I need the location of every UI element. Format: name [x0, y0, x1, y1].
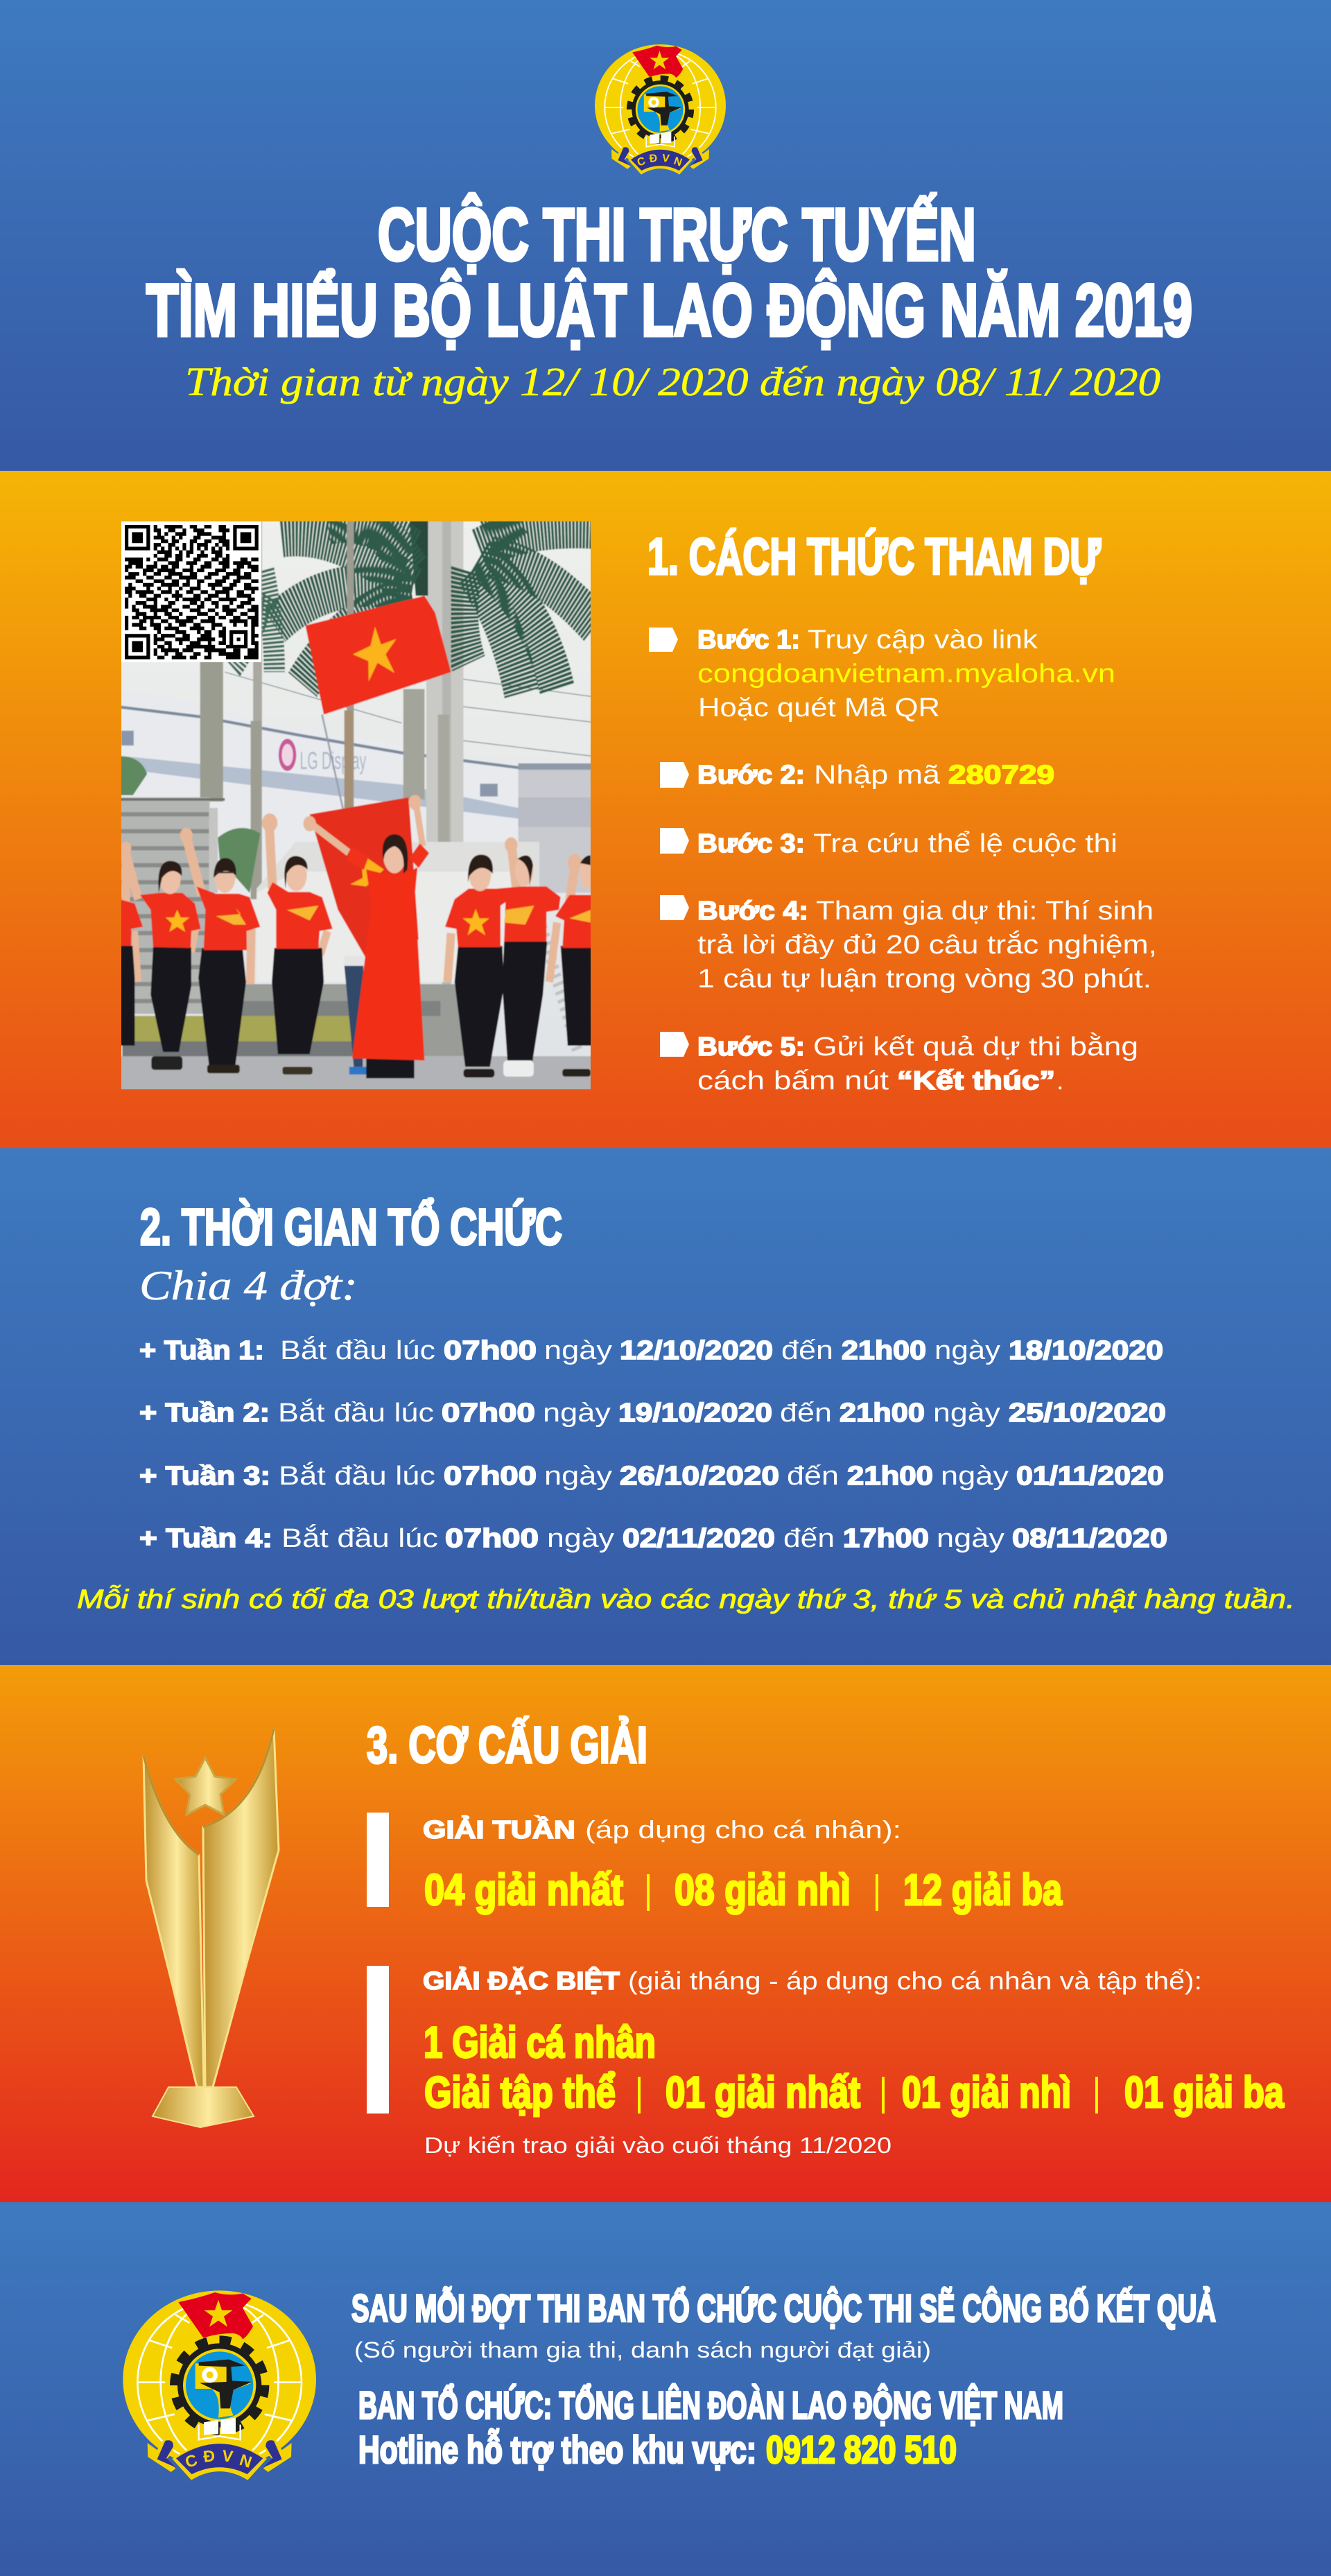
step 4: trả lời đầy đủ 20 câu trắc nghiệm,: [697, 930, 1157, 960]
week 3: ngày: [544, 1462, 612, 1491]
step 4: Tham gia dự thi: Thí sinh: [816, 897, 1154, 926]
weekly prize block: (áp dụng cho cá nhân):: [585, 1815, 901, 1844]
week 2: Bắt đầu lúc: [278, 1398, 434, 1428]
week 1: [139, 1335, 1163, 1365]
week 4: ngày: [937, 1524, 1004, 1553]
step 2: 280729: [948, 761, 1054, 790]
icon: union logo bottom: N: [237, 2450, 254, 2471]
week 1: đến: [781, 1336, 833, 1365]
week 2: [139, 1398, 1166, 1428]
week 4: 08/11/2020: [1012, 1524, 1167, 1553]
step 2: [660, 761, 1054, 790]
heading: section 2: 2. THỜI GIAN TỔ CHỨC: [140, 1198, 562, 1256]
weekly prize block: GIẢI TUẦN: [423, 1815, 575, 1844]
hotline: 0912 820 510: [766, 2428, 957, 2471]
step 3: [660, 828, 1117, 858]
step 5: Gửi kết quả dự thi bằng: [813, 1032, 1138, 1062]
footer note: (Số người tham gia thi, danh sách người đạt giải): [354, 2337, 931, 2362]
sign: LG Display: LG Display: [299, 746, 367, 774]
icon: union logo top: N: [672, 155, 684, 169]
person 7: [549, 856, 600, 1077]
week 1: ngày: [544, 1336, 612, 1365]
step 1: congdoanvietnam.myaloha.vn: [697, 659, 1115, 689]
icon: union logo bottom: Đ: [202, 2446, 216, 2466]
person 6: [503, 854, 582, 1077]
shed: [112, 797, 225, 1014]
step 5: cách bấm nút: [697, 1066, 889, 1096]
icon: gold trophy: [143, 1729, 279, 2127]
week 2: + Tuần 2:: [139, 1399, 270, 1428]
step 5: .: [1056, 1066, 1064, 1096]
panel: header: [0, 0, 1331, 471]
week 3: ngày: [941, 1462, 1009, 1491]
hotline: Hotline hỗ trợ theo khu vực:: [358, 2428, 756, 2471]
week 1: ngày: [934, 1336, 1000, 1365]
week 4: 02/11/2020: [623, 1524, 775, 1553]
week 3: 01/11/2020: [1016, 1462, 1164, 1491]
special prize block: 1 Giải cá nhân: [424, 2019, 656, 2067]
icon: union logo bottom: C: [183, 2450, 200, 2471]
step 4: 1 câu tự luận trong vòng 30 phút.: [697, 965, 1151, 994]
weekly prize block: 04 giải nhất: [424, 1866, 623, 1914]
week 1: 21h00: [842, 1336, 926, 1365]
special prize block: GIẢI ĐẶC BIỆT: [423, 1966, 620, 1995]
week 4: [139, 1523, 1167, 1553]
week 4: đến: [783, 1524, 835, 1553]
special prize block: 01 giải nhì: [902, 2068, 1071, 2117]
week 3: Bắt đầu lúc: [279, 1461, 435, 1491]
week 4: Bắt đầu lúc: [281, 1523, 438, 1553]
special prize block: (giải tháng - áp dụng cho cá nhân và tập thể):: [628, 1966, 1202, 1995]
panel: prizes: [0, 1665, 1331, 2202]
week 2: ngày: [933, 1399, 1000, 1428]
QR code: [121, 521, 261, 662]
heading: section 1: 1. CÁCH THỨC THAM DỰ: [647, 528, 1101, 585]
week 4: 07h00: [445, 1524, 539, 1553]
special prize block: Giải tập thể: [424, 2068, 616, 2117]
hand-held flag: [310, 797, 419, 958]
step 5: Bước 5:: [697, 1032, 805, 1062]
step 4: [660, 895, 1157, 994]
icon: union logo top: C: [636, 155, 647, 169]
weekly prize block: 12 giải ba: [903, 1866, 1063, 1914]
step 1: [649, 625, 1115, 723]
week 1: 07h00: [444, 1336, 537, 1365]
week 1: 12/10/2020: [620, 1336, 773, 1365]
person 1: [121, 842, 201, 1070]
woman in red ao dai: [304, 795, 424, 1078]
week 2: 07h00: [442, 1399, 535, 1428]
heading: section 3: 3. CƠ CẤU GIẢI: [367, 1716, 647, 1774]
person 2: [180, 828, 260, 1073]
icon: union logo bottom: [123, 2290, 316, 2480]
special prize block: [367, 1966, 1285, 2117]
step 1: Hoặc quét Mã QR: [698, 693, 940, 723]
week 3: + Tuần 3:: [139, 1462, 270, 1491]
step 2: Nhập mã: [814, 761, 941, 790]
week 3: 26/10/2020: [620, 1462, 779, 1491]
person 5: [445, 837, 522, 1078]
step 5: “Kết thúc”: [897, 1066, 1055, 1096]
sign: LG Display: [279, 738, 367, 774]
note: attempts per week: Mỗi thí sinh có tối đa 03 lượt thi/tuần vào các ngày thứ 3, thứ 5 và chủ nhật hàng tuần.: [77, 1584, 1295, 1614]
title line 1: CUỘC THI TRỰC TUYẾN: [378, 193, 976, 276]
flag on pole: [306, 596, 451, 715]
note: award date: Dự kiến trao giải vào cuối tháng 11/2020: [424, 2133, 891, 2158]
week 3: 21h00: [847, 1462, 933, 1491]
panel: schedule: [0, 1148, 1331, 1665]
week 3: đến: [787, 1462, 839, 1491]
step 3: Tra cứu thể lệ cuộc thi: [813, 829, 1117, 858]
special prize block: 01 giải ba: [1124, 2068, 1285, 2117]
week 1: + Tuần 1:: [139, 1336, 264, 1365]
week 1: Bắt đầu lúc: [280, 1335, 435, 1365]
icon: union logo top: Đ: [649, 153, 658, 165]
week 4: ngày: [547, 1524, 614, 1553]
week 4: + Tuần 4:: [139, 1524, 272, 1553]
subtitle date range: Thời gian từ ngày 12/ 10/ 2020 đến ngày 08/ 11/ 2020: [185, 359, 1160, 404]
panel: footer: [0, 2202, 1331, 2576]
step 5: [660, 1032, 1138, 1096]
week 2: đến: [780, 1399, 832, 1428]
step 1: Bước 1:: [697, 625, 800, 655]
week 2: 21h00: [840, 1399, 925, 1428]
week 2: 19/10/2020: [618, 1399, 772, 1428]
step 1: Truy cập vào link: [808, 625, 1038, 655]
person: far left: [112, 842, 143, 1046]
panel: how to participate: [0, 471, 1331, 1148]
week 2: ngày: [543, 1399, 611, 1428]
step 3: Bước 3:: [697, 829, 805, 858]
photo: group with Vietnamese flags: [121, 521, 591, 1089]
weekly prize block: 08 giải nhì: [675, 1866, 851, 1914]
special prize block: 01 giải nhất: [666, 2068, 860, 2117]
week 2: 25/10/2020: [1009, 1399, 1166, 1428]
week 3: 07h00: [444, 1462, 537, 1491]
icon: union logo top: [595, 44, 726, 175]
week 4: 17h00: [843, 1524, 929, 1553]
weekly prize block: [367, 1813, 1063, 1914]
week 3: [139, 1461, 1164, 1491]
week 1: 18/10/2020: [1009, 1336, 1163, 1365]
person behind: [345, 956, 367, 1075]
subheading: divided into 4 rounds: Chia 4 đợt:: [139, 1263, 358, 1308]
icon: union logo top: V: [661, 153, 670, 165]
step 2: Bước 2:: [697, 761, 805, 790]
person 3: [262, 813, 333, 1075]
icon: union logo bottom: V: [221, 2446, 234, 2466]
step 4: Bước 4:: [697, 897, 808, 926]
